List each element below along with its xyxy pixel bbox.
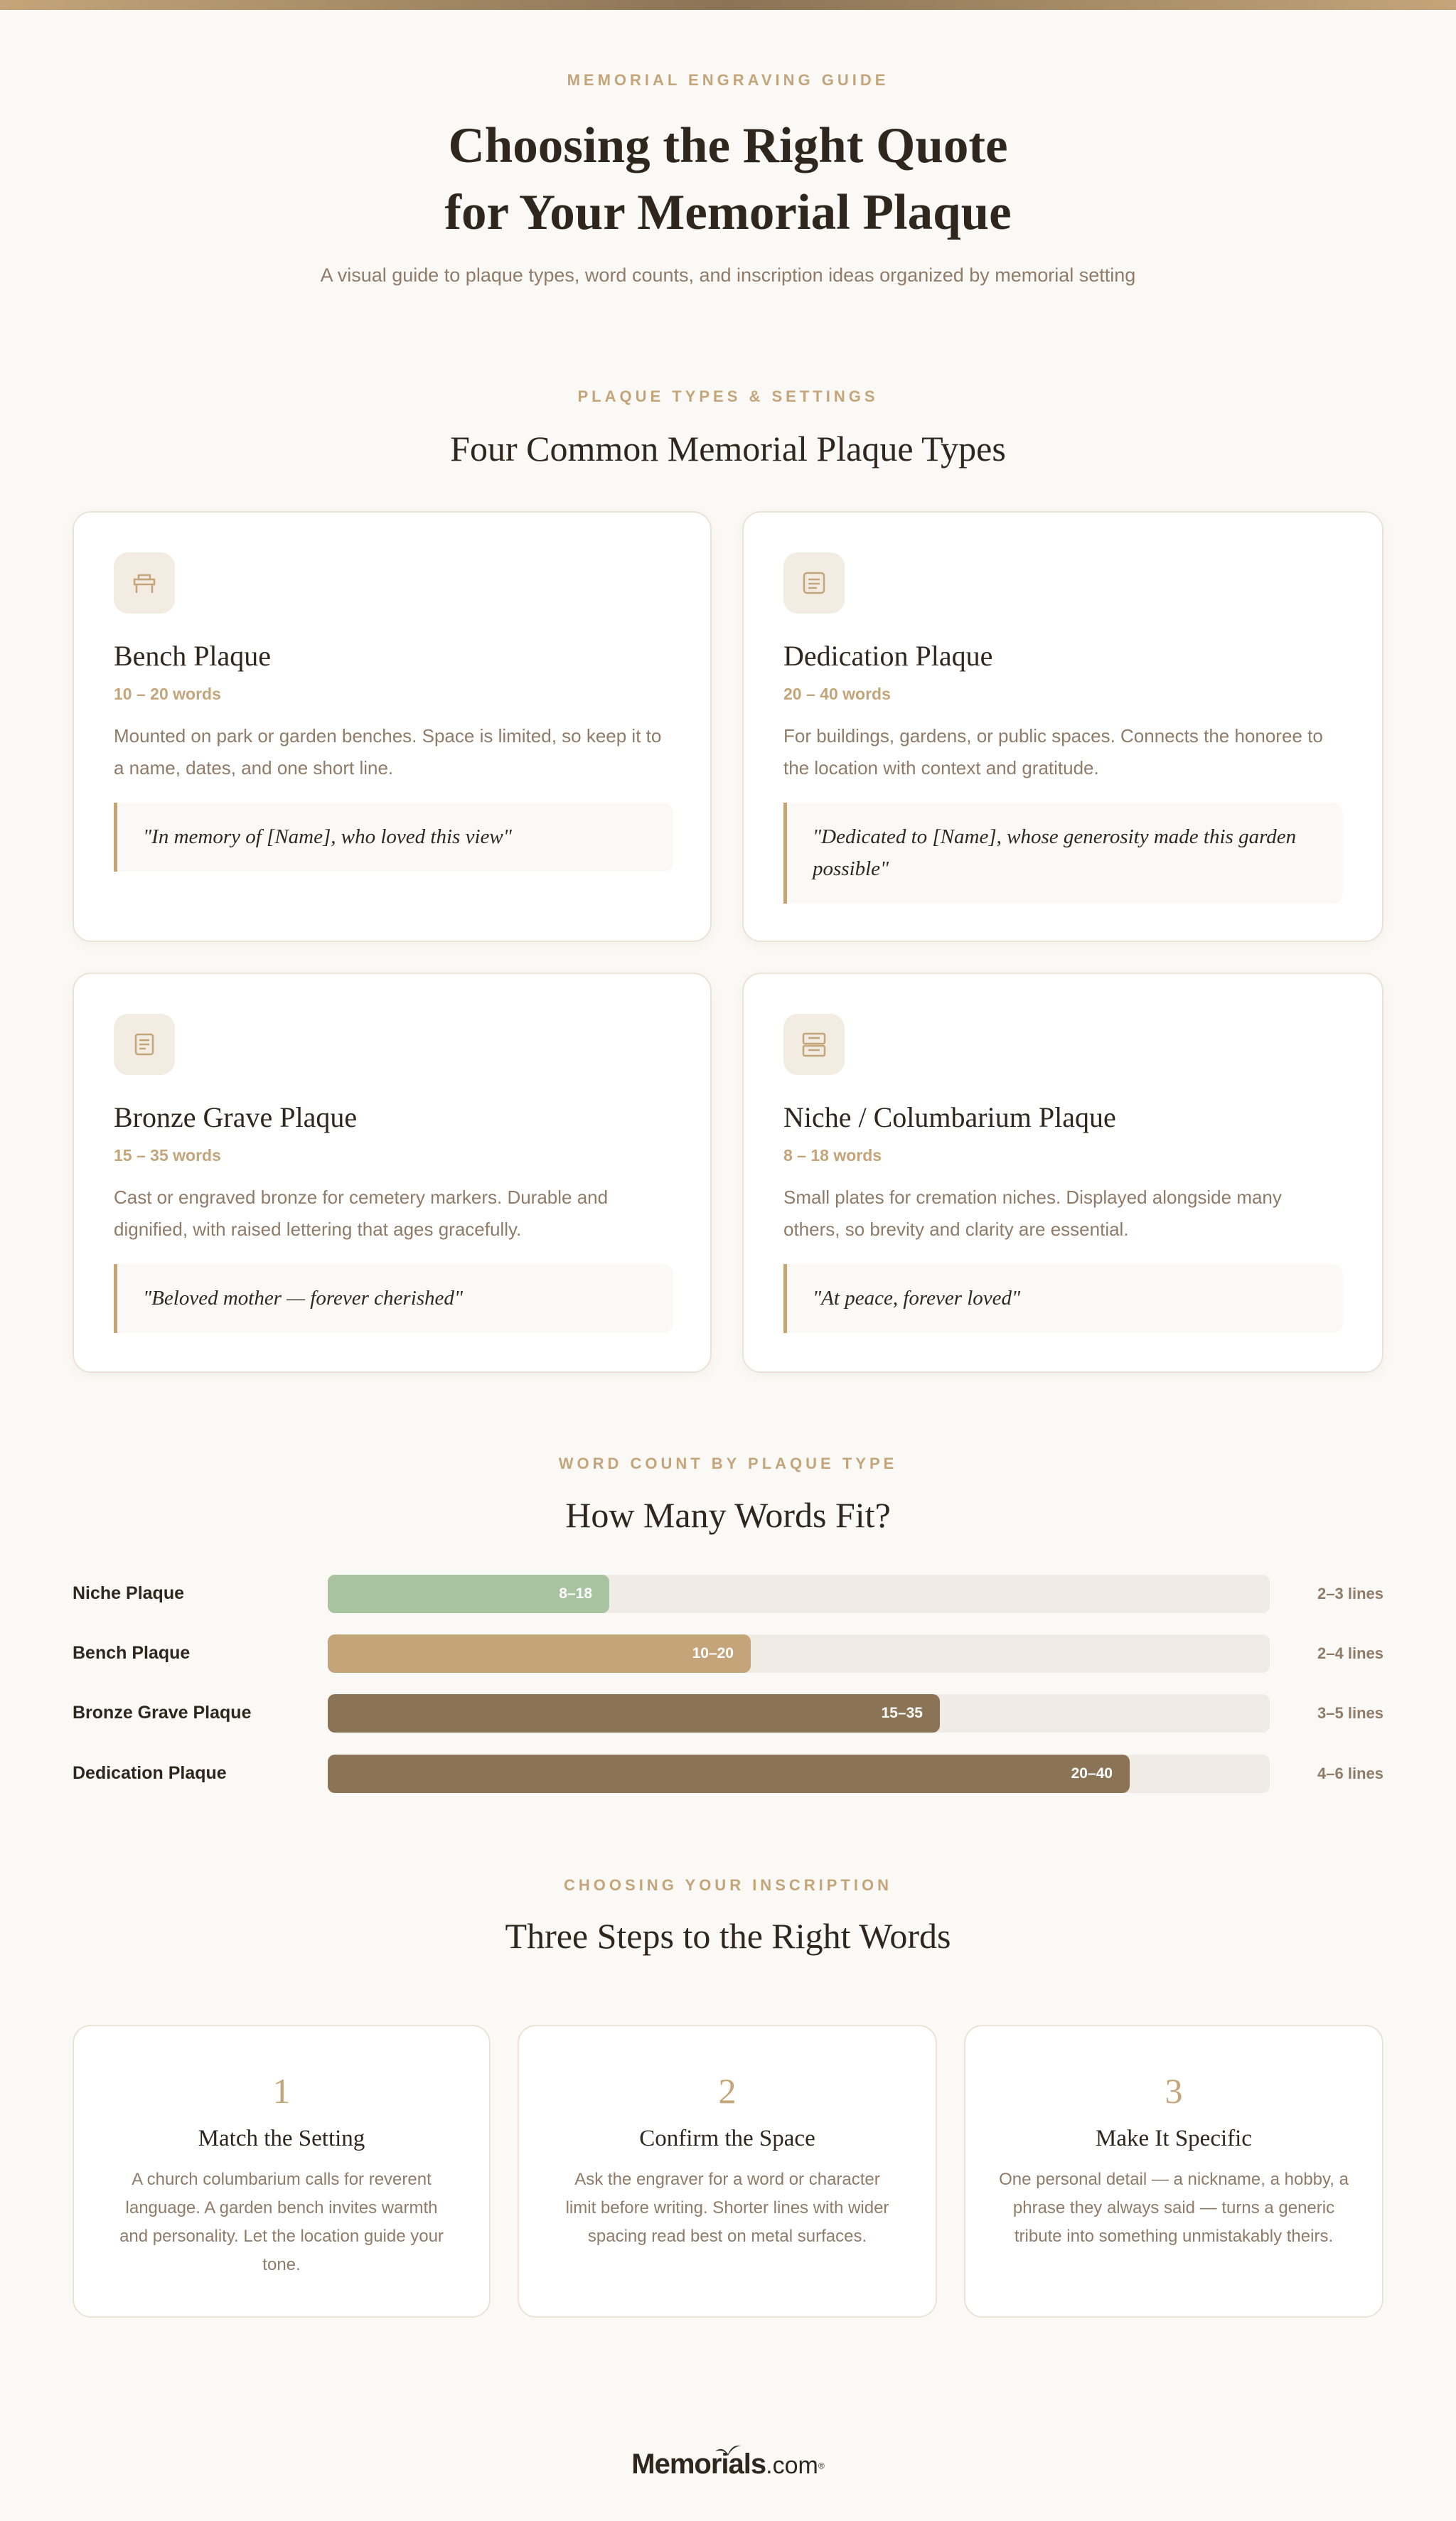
quote <box>783 1264 1343 1333</box>
bar: dedication <box>328 1755 1270 1793</box>
lines: bronze: 3–5 lines <box>1317 1704 1383 1722</box>
panel: niche plaque <box>742 973 1383 1373</box>
step 3 card <box>964 2025 1383 2318</box>
card title: Bench Plaque <box>114 640 271 672</box>
step text: One personal detail — a nickname, a hobby, a phrase they always said — turns a generic tribute into something unmistakably theirs. <box>999 2170 1349 2246</box>
bar: bench <box>328 1634 1270 1673</box>
card title: Bronze Grave Plaque <box>114 1101 357 1133</box>
number 1: 1 <box>273 2071 290 2111</box>
step text: A church columbarium calls for reverent language. A garden bench invites warmth and personality. Let the location guide your tone. <box>119 2170 444 2274</box>
bar: niche <box>328 1575 1270 1613</box>
word count: 10 – 20 words <box>114 685 221 703</box>
lines: bench: 2–4 lines <box>1317 1644 1383 1662</box>
quote: "In memory of [Name], who loved this view" <box>143 825 512 848</box>
section eyebrow: steps: CHOOSING YOUR INSCRIPTION <box>564 1876 892 1894</box>
bar label: dedication: Dedication Plaque <box>73 1763 227 1783</box>
bar: bronze <box>328 1694 1270 1733</box>
icon: document <box>783 552 845 614</box>
word count: 15 – 35 words <box>114 1146 221 1165</box>
section eyebrow: word count: WORD COUNT BY PLAQUE TYPE <box>559 1455 897 1472</box>
bar: niche: 8–18 <box>559 1585 592 1602</box>
description: Mounted on park or garden benches. Space is limited, so keep it to a name, dates, and one short line. <box>114 725 661 778</box>
panel: dedication plaque <box>742 511 1383 942</box>
bar: dedication: 20–40 <box>1071 1765 1113 1782</box>
bar label: bench: Bench Plaque <box>73 1643 190 1663</box>
step title: Match the Setting <box>198 2126 365 2151</box>
step title: Make It Specific <box>1096 2126 1252 2151</box>
heading: word count: How Many Words Fit? <box>565 1495 891 1535</box>
description: Cast or engraved bronze for cemetery markers. Durable and dignified, with raised lettering that ages gracefully. <box>114 1187 608 1240</box>
panel: bench plaque <box>73 511 712 942</box>
icon: bench <box>114 552 175 614</box>
quote: "Beloved mother — forever cherished" <box>143 1287 463 1310</box>
subtitle: A visual guide to plaque types, word counts, and inscription ideas organized by memorial setting <box>321 264 1135 286</box>
step text: Ask the engraver for a word or character limit before writing. Shorter lines with wider spacing read best on metal surfaces. <box>566 2170 889 2246</box>
number 3: 3 <box>1165 2071 1183 2111</box>
card title: Dedication Plaque <box>783 640 992 672</box>
title <box>444 118 1012 240</box>
heading: types: Four Common Memorial Plaque Types <box>450 429 1006 469</box>
top gradient bar <box>0 0 1456 10</box>
lines: niche: 2–3 lines <box>1317 1585 1383 1602</box>
quote <box>114 1264 673 1333</box>
bar label: niche: Niche Plaque <box>73 1583 184 1603</box>
word count: 8 – 18 words <box>783 1146 882 1165</box>
word count: 20 – 40 words <box>783 685 891 703</box>
logo: Memorials.com® <box>631 2448 825 2480</box>
card title: Niche / Columbarium Plaque <box>783 1101 1116 1133</box>
quote <box>114 803 673 872</box>
bar: bench: 10–20 <box>692 1645 734 1661</box>
step 1 card <box>73 2025 491 2318</box>
quote <box>783 803 1343 904</box>
bar label: bronze: Bronze Grave Plaque <box>73 1703 251 1723</box>
step title: Confirm the Space <box>639 2126 815 2151</box>
title: Choosing the Right Quote <box>448 118 1008 173</box>
section eyebrow: types: PLAQUE TYPES & SETTINGS <box>577 387 879 405</box>
panel: bronze grave plaque <box>73 973 712 1373</box>
step 2 card <box>518 2025 937 2318</box>
bar: bronze: 15–35 <box>882 1705 923 1721</box>
quote: "Dedicated to [Name], whose generosity made this garden possible" <box>813 825 1296 880</box>
description: Small plates for cremation niches. Displayed alongside many others, so brevity and clarity are essential. <box>783 1187 1282 1240</box>
number 2: 2 <box>718 2071 737 2111</box>
lines: dedication: 4–6 lines <box>1317 1765 1383 1782</box>
icon: niche drawers <box>783 1014 845 1075</box>
heading: steps: Three Steps to the Right Words <box>505 1916 951 1956</box>
quote: "At peace, forever loved" <box>813 1287 1020 1310</box>
title: for Your Memorial Plaque <box>444 185 1012 240</box>
header eyebrow: MEMORIAL ENGRAVING GUIDE <box>567 71 889 89</box>
icon: plaque <box>114 1014 175 1075</box>
description: For buildings, gardens, or public spaces. Connects the honoree to the location with context and gratitude. <box>783 725 1323 778</box>
